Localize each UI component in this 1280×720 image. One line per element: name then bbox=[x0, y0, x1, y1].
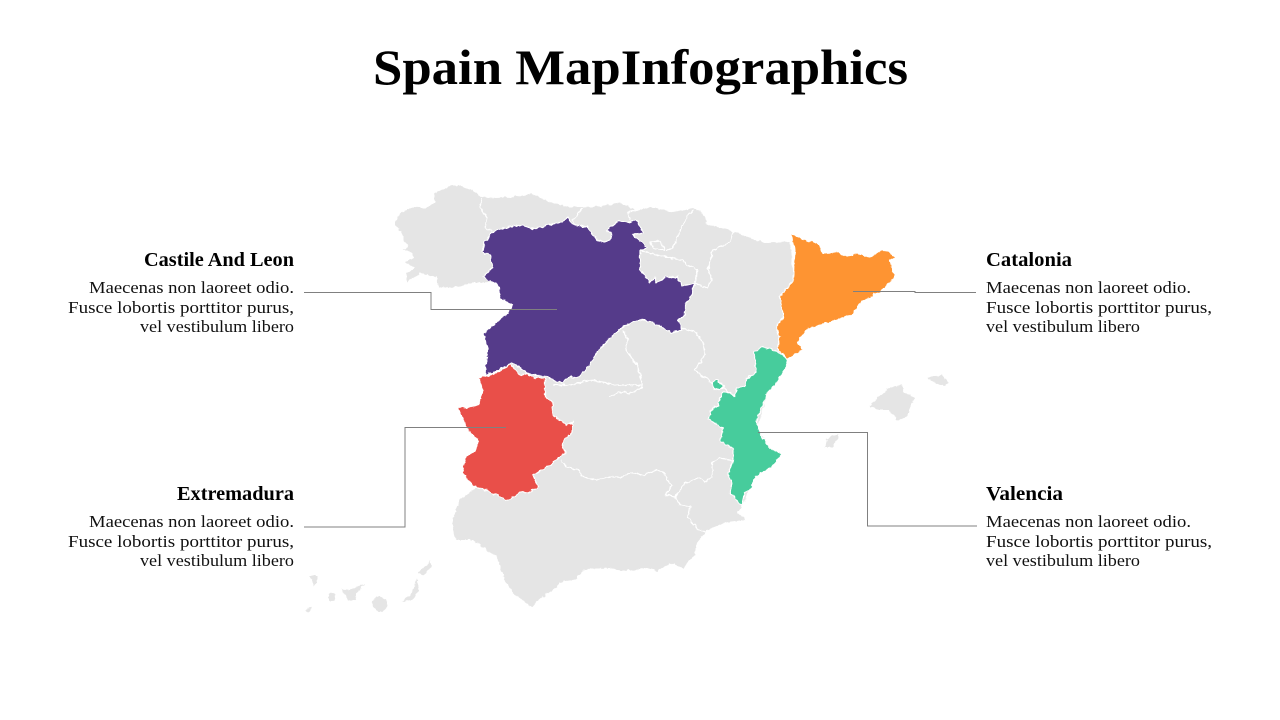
label: Valencia: vel vestibulum libero bbox=[986, 551, 1140, 570]
region: Valencia bbox=[708, 347, 788, 506]
region: Extremadura bbox=[457, 364, 573, 501]
label: Extremadura bbox=[68, 483, 294, 570]
label: Catalonia: Catalonia bbox=[986, 249, 1072, 271]
region: Castile and Leon bbox=[482, 217, 695, 383]
connector: Valencia bbox=[758, 432, 977, 526]
label: Valencia: Valencia bbox=[986, 483, 1063, 505]
connector: Extremadura bbox=[304, 428, 506, 527]
label: Castile and Leon: Maecenas non laoreet odio. bbox=[89, 278, 294, 297]
label: Castile and Leon: Fusce lobortis porttitor purus, bbox=[68, 298, 294, 317]
label: Extremadura: Maecenas non laoreet odio. bbox=[89, 512, 294, 531]
map of Spain bbox=[305, 185, 949, 612]
label: Valencia: Maecenas non laoreet odio. bbox=[986, 512, 1191, 531]
label: Catalonia bbox=[986, 249, 1212, 336]
label: Extremadura: vel vestibulum libero bbox=[140, 551, 294, 570]
mainland base bbox=[395, 185, 795, 607]
region: Balearic Islands bbox=[825, 375, 949, 447]
region: Canary Islands bbox=[305, 560, 431, 612]
internal region borders bbox=[480, 198, 735, 532]
label: Valencia bbox=[986, 483, 1212, 570]
region: Catalonia bbox=[776, 233, 897, 359]
label: Castile and Leon: vel vestibulum libero bbox=[140, 317, 294, 336]
label: Extremadura: Extremadura bbox=[177, 483, 294, 505]
label: Catalonia: vel vestibulum libero bbox=[986, 317, 1140, 336]
label: Castile and Leon bbox=[68, 249, 294, 336]
connector: Catalonia bbox=[853, 292, 976, 293]
label: Castile and Leon: Castile And Leon bbox=[144, 249, 294, 271]
label: Valencia: Fusce lobortis porttitor purus, bbox=[986, 532, 1212, 551]
label: Extremadura: Fusce lobortis porttitor purus, bbox=[68, 532, 294, 551]
label: Catalonia: Fusce lobortis porttitor purus, bbox=[986, 298, 1212, 317]
connector: Castile and Leon bbox=[304, 292, 557, 310]
title: Spain MapInfographics bbox=[373, 39, 908, 95]
label: Catalonia: Maecenas non laoreet odio. bbox=[986, 278, 1191, 297]
